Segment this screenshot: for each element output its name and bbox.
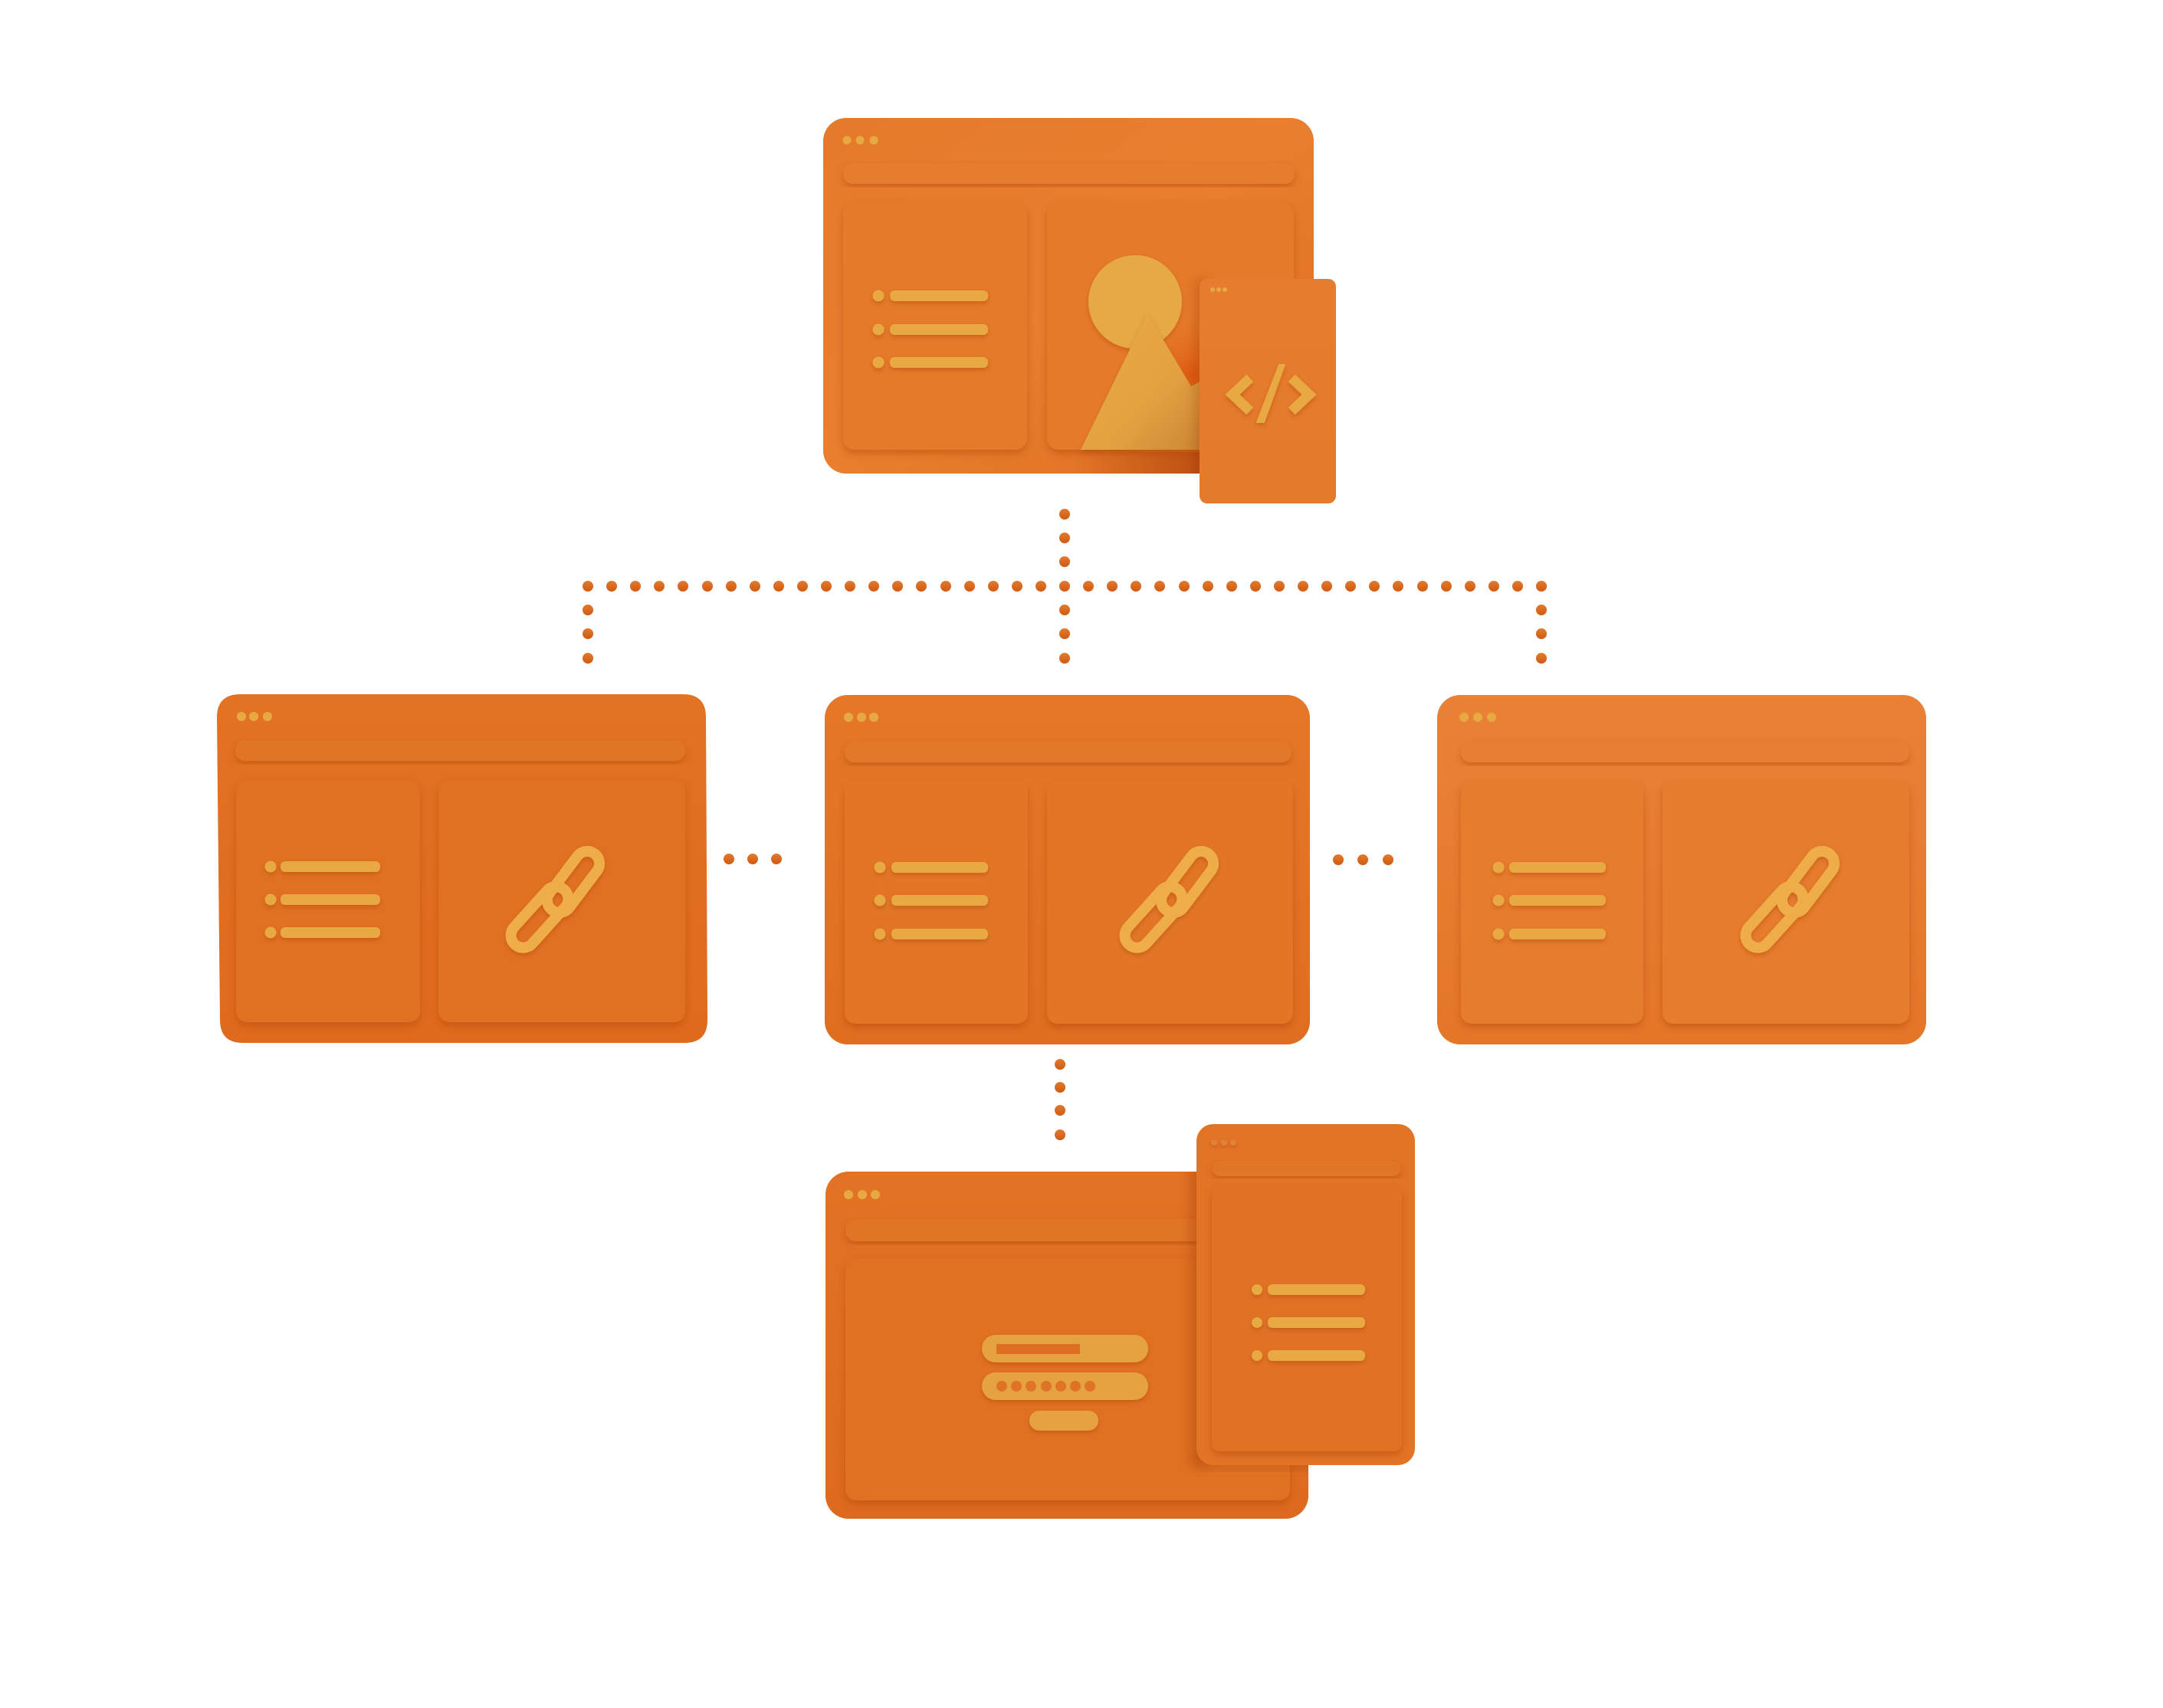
top web page window: [823, 118, 1336, 503]
icon: code brackets: [1232, 365, 1309, 422]
address bar: [235, 740, 685, 761]
window frame: [217, 694, 707, 1043]
window dots: [844, 713, 878, 722]
connector: right drop: [1536, 605, 1547, 664]
window frame: [825, 695, 1310, 1044]
window dots: [844, 1190, 880, 1199]
list lines: [874, 861, 988, 939]
address bar: [1461, 742, 1909, 762]
bottom login page window: [825, 1124, 1415, 1519]
right link panel: [1047, 781, 1293, 1024]
left text panel: [1461, 781, 1643, 1024]
window frame: [825, 1172, 1308, 1519]
list lines: [1493, 861, 1606, 939]
connector: left drop: [583, 605, 593, 664]
phone dots: [1211, 1139, 1236, 1146]
window frame: [1437, 695, 1926, 1044]
shadow below image panel: [1073, 452, 1200, 474]
connector: middle to bottom: [1055, 1059, 1065, 1140]
connector: left to middle: [724, 854, 782, 864]
password dots: [996, 1381, 1095, 1392]
phone address bar: [1213, 1161, 1400, 1176]
icon: chain link: [1120, 847, 1218, 952]
window dots: [843, 136, 878, 144]
username text block: [996, 1344, 1080, 1354]
address bar: [845, 742, 1292, 762]
window frame: [823, 118, 1314, 474]
address bar: [843, 163, 1295, 184]
connector: horizontal branch: [583, 581, 1547, 592]
connector: vertical from top window: [1059, 509, 1070, 664]
phone shadow on window: [1191, 278, 1206, 474]
phone window: [1196, 1124, 1415, 1465]
content panel: [845, 1258, 1290, 1500]
username field: [982, 1335, 1148, 1362]
right link panel: [1662, 781, 1909, 1024]
left text panel: [236, 780, 420, 1022]
address bar: [845, 1219, 1290, 1241]
diagram: [217, 118, 1926, 1519]
phone dots: [1210, 287, 1227, 292]
window dots: [237, 712, 272, 721]
connector: middle to right: [1333, 854, 1393, 865]
password field: [982, 1372, 1148, 1400]
left bracket: [1232, 382, 1246, 408]
right bracket: [1295, 382, 1309, 408]
icon: chain link: [1741, 847, 1839, 952]
icon: chain link: [506, 847, 604, 952]
left text panel: [845, 781, 1028, 1024]
submit button: [1029, 1411, 1098, 1431]
slash: [1257, 365, 1285, 422]
phone shadow on window: [1187, 1172, 1308, 1471]
right image panel: [1047, 202, 1294, 450]
left linked page window: [217, 694, 707, 1043]
login form: [982, 1335, 1148, 1431]
image placeholder: sun and mountain: [1081, 255, 1246, 450]
phone panel: [1212, 1186, 1402, 1451]
right linked page window: [1437, 695, 1926, 1044]
list lines: [872, 290, 988, 368]
list lines: [265, 861, 380, 938]
phone card: [1200, 279, 1336, 503]
window dots: [1459, 713, 1496, 722]
middle linked page window: [825, 695, 1310, 1044]
right link panel: [438, 780, 685, 1022]
left text panel: [843, 202, 1027, 450]
list lines: [1252, 1284, 1365, 1361]
